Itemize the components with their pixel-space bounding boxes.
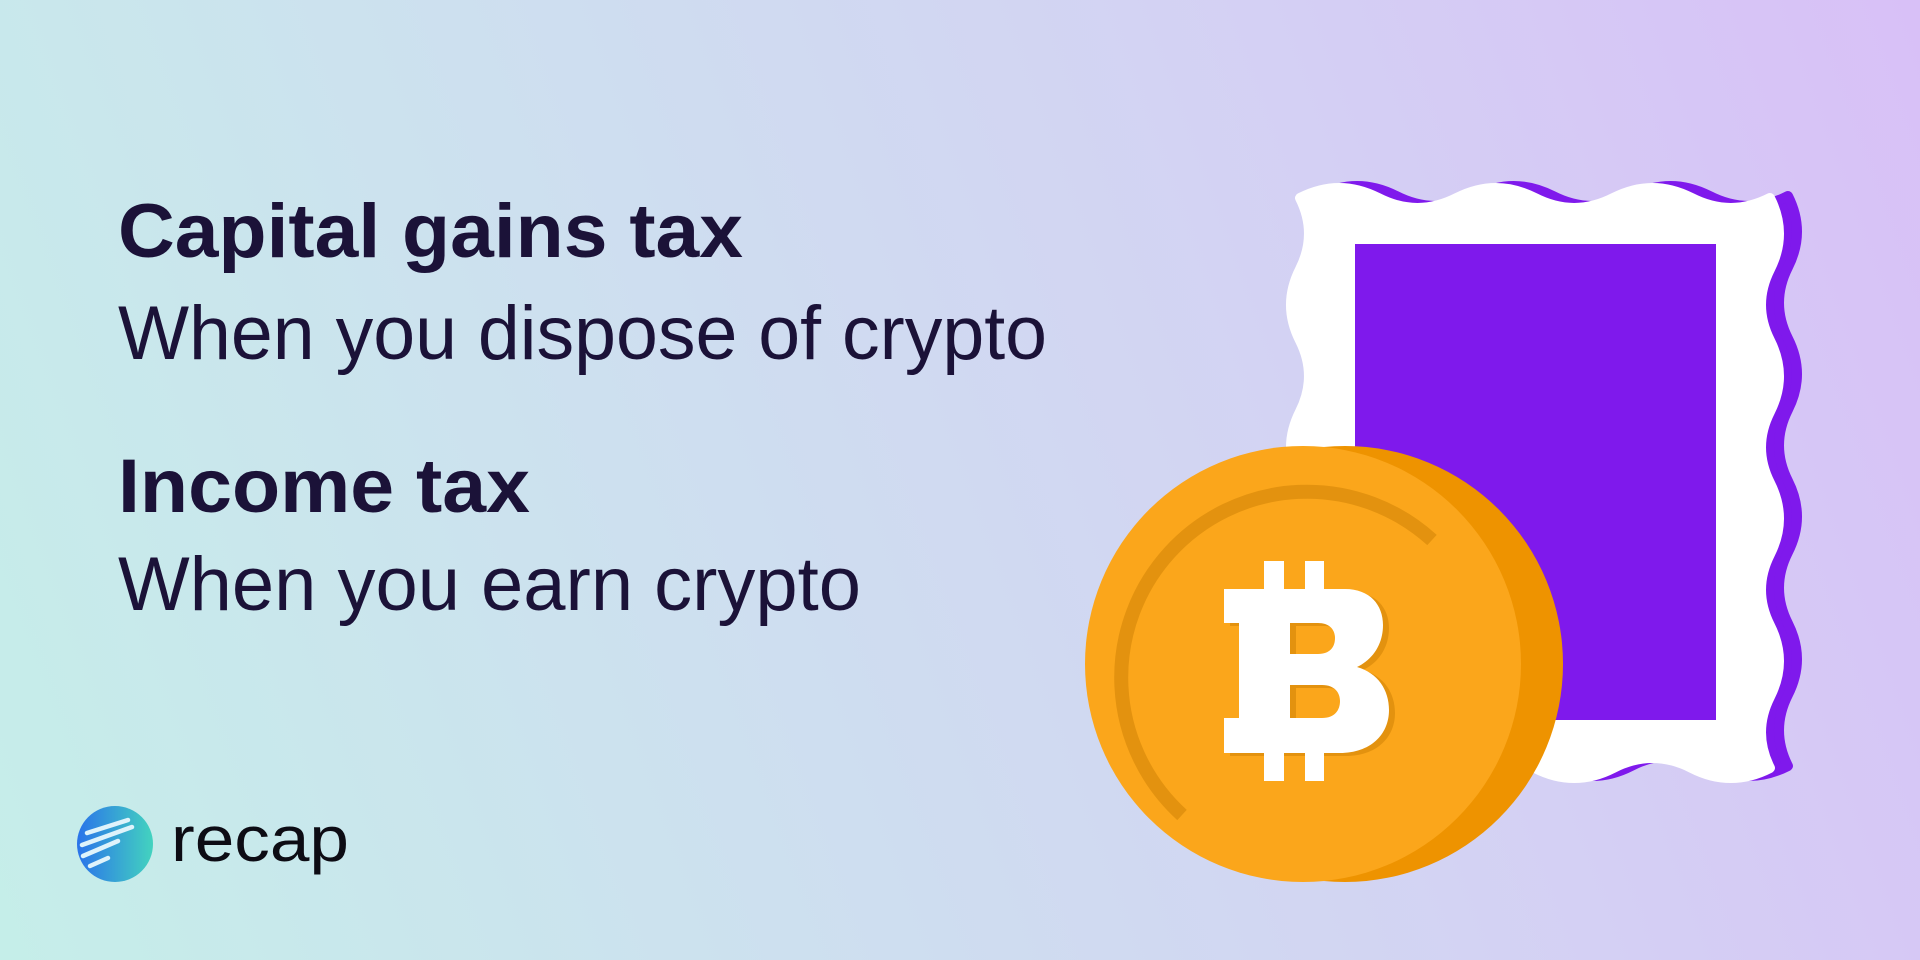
logo: recap [77, 803, 349, 882]
icon: recap circle [77, 806, 153, 882]
icon: bitcoin coin [1085, 446, 1563, 882]
icon: stamp [1291, 186, 1797, 778]
bitcoin symbol shadow [1230, 592, 1395, 756]
stamp image area [1355, 244, 1716, 720]
heading: capital gains tax: Capital gains tax [118, 189, 743, 274]
stamp paper [1291, 188, 1779, 778]
bitcoin symbol [1224, 561, 1389, 781]
coin face [1085, 446, 1521, 882]
text: when you earn crypto: When you earn crypto [118, 542, 861, 627]
coin inner ring [1121, 492, 1432, 815]
heading: income tax: Income tax [118, 444, 530, 529]
logo text: recap [171, 803, 349, 875]
text: when you dispose of crypto: When you dispose of crypto [118, 291, 1047, 376]
stamp shadow [1309, 186, 1797, 776]
coin edge [1127, 446, 1563, 882]
